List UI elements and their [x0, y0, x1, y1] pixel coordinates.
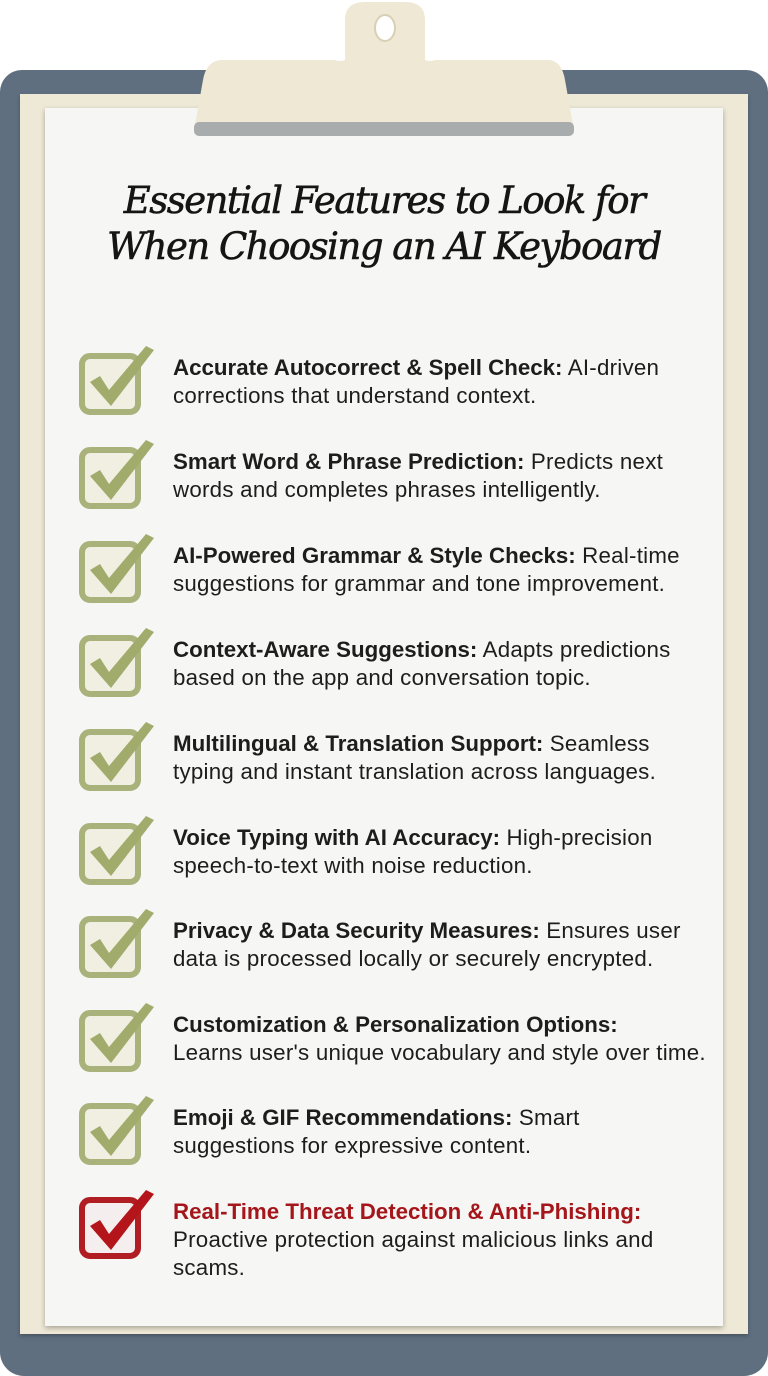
item 5: Multilingual & Translation Support: Seamless — [173, 731, 650, 756]
item 1: corrections that understand context. — [173, 383, 536, 408]
item 2: words and completes phrases intelligently. — [173, 477, 601, 502]
item 8: Customization & Personalization Options: — [173, 1012, 618, 1037]
item 10: highlighted: scams. — [173, 1255, 245, 1280]
item 4: based on the app and conversation topic. — [173, 665, 591, 690]
title: Essential Features to Look for — [124, 179, 644, 222]
item 6: speech-to-text with noise reduction. — [173, 853, 533, 878]
item 9: Emoji & GIF Recommendations: Smart — [173, 1105, 580, 1130]
item 7: data is processed locally or securely encrypted. — [173, 946, 653, 971]
item 6: Voice Typing with AI Accuracy: High-precision — [173, 825, 653, 850]
item 2: Smart Word & Phrase Prediction: Predicts next — [173, 449, 663, 474]
item 5: typing and instant translation across languages. — [173, 759, 656, 784]
item 8 — [79, 1003, 706, 1072]
item 1 — [79, 346, 659, 415]
item 4 — [79, 628, 671, 697]
item 5 — [79, 722, 656, 791]
item 7 — [79, 909, 681, 978]
item 8: Learns user's unique vocabulary and style over time. — [173, 1040, 706, 1065]
item 10: highlighted — [79, 1190, 653, 1280]
clip — [194, 2, 574, 136]
item 6 — [79, 816, 653, 885]
title: When Choosing an AI Keyboard — [107, 225, 661, 268]
front paper — [45, 108, 723, 1326]
item 7: Privacy & Data Security Measures: Ensures user — [173, 918, 681, 943]
item 2 — [79, 440, 663, 509]
item 9: suggestions for expressive content. — [173, 1133, 531, 1158]
item 10: highlighted: Real-Time Threat Detection & Anti-Phishing: — [173, 1199, 641, 1224]
item 3: AI-Powered Grammar & Style Checks: Real-time — [173, 543, 680, 568]
item 3: suggestions for grammar and tone improvement. — [173, 571, 665, 596]
item 10: highlighted: Proactive protection against malicious links and — [173, 1227, 653, 1252]
title — [107, 179, 662, 268]
item 3 — [79, 534, 680, 603]
item 4: Context-Aware Suggestions: Adapts predictions — [173, 637, 671, 662]
item 1: Accurate Autocorrect & Spell Check: AI-driven — [173, 355, 659, 380]
item 9 — [79, 1096, 580, 1165]
